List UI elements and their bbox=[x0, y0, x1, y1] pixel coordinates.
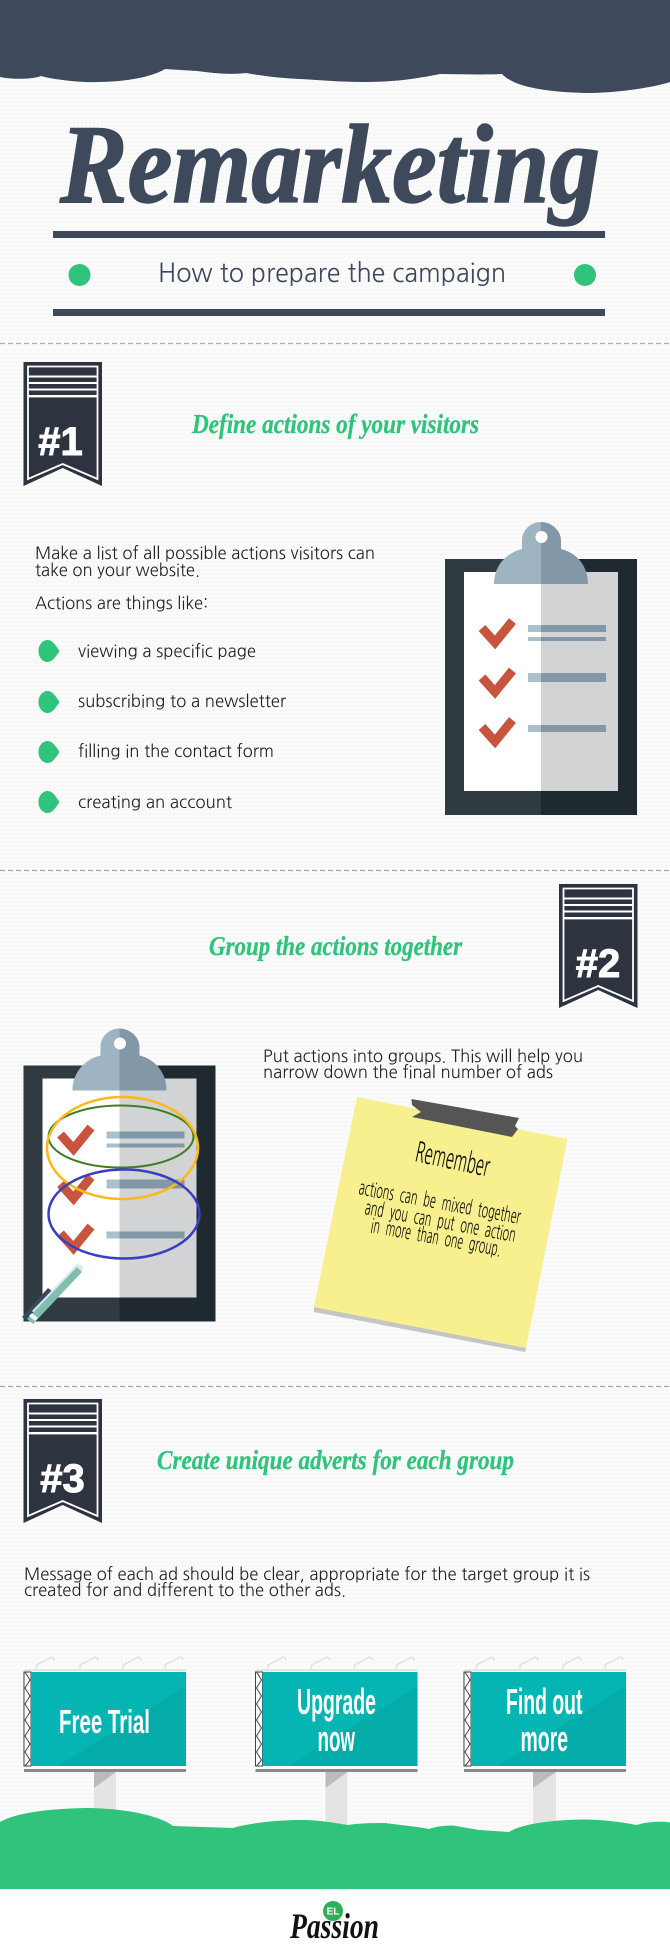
heading: step 2: Group the actions together bbox=[209, 931, 462, 961]
billboard: Free Trial: Free Trial bbox=[59, 1703, 150, 1740]
logo: Passion bbox=[289, 1906, 379, 1946]
note body: in more than one group. bbox=[369, 1215, 503, 1259]
billboard: Find out more: more bbox=[520, 1718, 568, 1759]
billboard: Upgrade now bbox=[256, 1657, 418, 1832]
note body: and you can put one action bbox=[363, 1197, 518, 1245]
logo bbox=[289, 1901, 379, 1946]
action list: creating an account bbox=[78, 794, 233, 811]
text: step 3 bbox=[24, 1566, 590, 1599]
heading: step 1: Define actions of your visitors bbox=[191, 409, 479, 439]
subtitle block: How to prepare the campaign bbox=[158, 260, 506, 286]
badge: step 3 bbox=[24, 1399, 102, 1523]
note body: actions can be mixed together bbox=[357, 1177, 523, 1227]
green ground bbox=[0, 1808, 670, 1889]
billboard: Find out more: Find out bbox=[506, 1681, 583, 1722]
intro text: step 1: take on your website. bbox=[35, 562, 200, 579]
text: step 3: Message of each ad should be clear, appropriate for the target group it is bbox=[24, 1566, 590, 1583]
badge: step 1 bbox=[24, 362, 102, 486]
subtitle block bbox=[53, 231, 605, 316]
badge: step 2: #2 bbox=[576, 942, 620, 986]
note heading: Remember bbox=[413, 1139, 493, 1182]
badge: step 3: #3 bbox=[40, 1457, 85, 1501]
text: step 2: narrow down the final number of ads bbox=[263, 1064, 553, 1081]
intro text: step 1 bbox=[35, 545, 375, 612]
action list: subscribing to a newsletter bbox=[78, 693, 287, 710]
action list: viewing a specific page bbox=[78, 643, 256, 660]
header cloud band bbox=[0, 0, 670, 93]
icon: pen bbox=[22, 1264, 83, 1324]
sticky note bbox=[314, 1097, 568, 1352]
tape bbox=[412, 1099, 519, 1137]
billboard: Upgrade now: Upgrade bbox=[297, 1681, 376, 1722]
title: Remarketing bbox=[59, 103, 600, 227]
intro text: step 1: Actions are things like: bbox=[35, 595, 208, 612]
heading: step 3: Create unique adverts for each group bbox=[157, 1445, 514, 1475]
note body bbox=[357, 1177, 523, 1259]
icon: clipboard with grouped actions bbox=[22, 1028, 216, 1324]
text: step 2 bbox=[263, 1048, 583, 1081]
icon: clipboard checklist bbox=[445, 522, 637, 815]
text: step 2: Put actions into groups. This will help you bbox=[263, 1048, 583, 1065]
billboard: Upgrade now: now bbox=[318, 1718, 356, 1759]
badge: step 2 bbox=[559, 884, 638, 1008]
text: step 3: created for and different to the other ads. bbox=[24, 1582, 346, 1599]
logo: EL bbox=[327, 1906, 339, 1918]
billboard: Find out more bbox=[464, 1657, 626, 1832]
action list bbox=[38, 640, 287, 813]
action list: filling in the contact form bbox=[78, 743, 274, 760]
badge: step 1: #1 bbox=[38, 420, 83, 464]
billboard: Free Trial bbox=[24, 1657, 186, 1832]
intro text: step 1: Make a list of all possible actions visitors can bbox=[35, 545, 375, 562]
